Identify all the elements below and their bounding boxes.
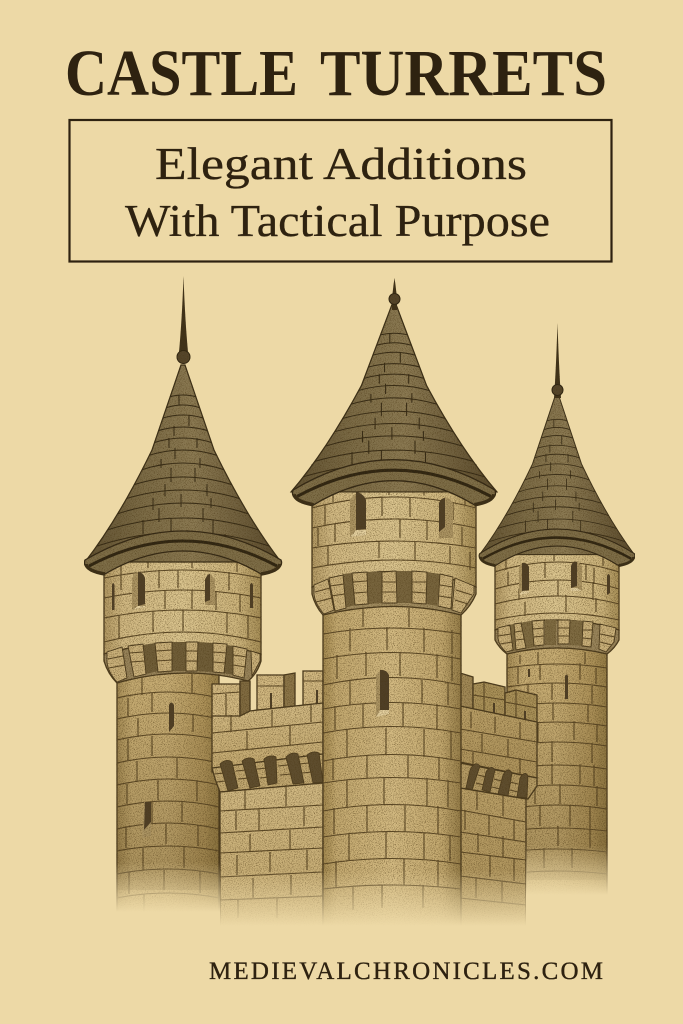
left tower fade [100,862,220,912]
right tower base cover [526,895,626,940]
left wall machicolations [212,752,323,792]
left drum [104,540,261,654]
central finial ball [389,294,400,304]
right wall upper [460,706,537,778]
website url: MEDIEVALCHRONICLES.COM [209,958,603,985]
left drum stonework [104,551,261,642]
left tower stonework [117,674,219,915]
subtitle line one: Elegant Additions [155,139,527,189]
left tower slit window [169,702,174,732]
right tower [479,323,635,930]
right finial ball [552,384,563,396]
central drum windows [350,492,453,538]
central eaves [292,460,496,505]
right merlons [460,673,537,725]
right tower body [507,640,607,930]
central tower body [323,600,461,930]
right curtain wall [460,673,537,930]
central tower stonework [323,608,461,910]
central fade [220,870,526,926]
subtitle line two: With Tactical Purpose [125,196,550,246]
subtitle box [70,120,612,262]
left wall upper [212,703,323,772]
left curtain wall [212,671,323,930]
right drum [495,535,619,630]
title [65,37,607,110]
title: TURRETS [320,37,607,110]
right wall lower [460,788,526,930]
central tower [291,278,497,930]
central base cover [210,926,540,940]
left merlons [257,671,323,710]
right drum windows [519,562,610,595]
left wall lower stonework [220,785,323,918]
left wall lower [220,783,323,930]
castle illustration [84,276,635,930]
right spire [554,323,561,398]
left roof [85,365,281,562]
right tower fade [526,845,626,895]
right tower slit window [565,674,568,699]
title: CASTLE [65,37,298,110]
left tower shading [117,700,219,890]
left tower body [117,665,219,930]
right machicolations [495,620,619,654]
central drum stonework [312,476,476,570]
right wall lower stonework [460,791,526,905]
central machicolations [312,571,476,615]
right eaves [479,529,635,566]
right tower shading [507,680,607,880]
left drum windows [112,572,253,610]
left tower [84,276,282,930]
left machicolations [104,642,261,683]
central roof [291,305,497,492]
right wall machicolations [460,763,537,799]
right roof [480,395,634,555]
central drum [312,465,476,587]
left tower lower window [142,802,151,838]
central spire [392,278,397,310]
right tower stonework [507,652,607,874]
left eaves [84,531,282,574]
right tower small slit [528,669,530,677]
corner merlon [212,681,250,716]
right wall upper stonework [460,712,537,775]
left finial ball [177,350,190,364]
central tower window [376,670,389,717]
left tower base cover [100,912,220,942]
right drum stonework [495,548,619,630]
left spire [179,276,188,352]
left wall upper stonework [212,705,323,753]
